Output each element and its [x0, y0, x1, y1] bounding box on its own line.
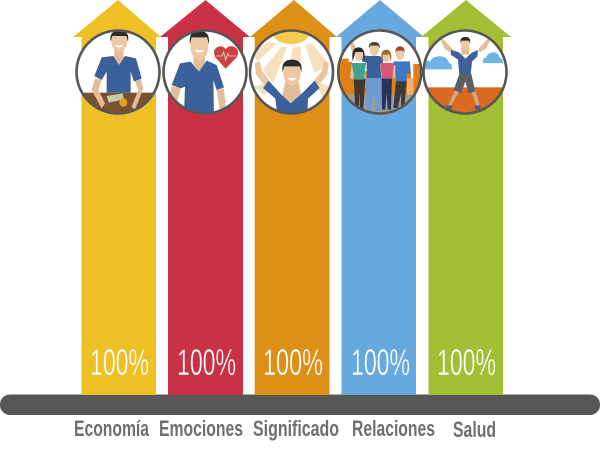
figure: woman in teal [350, 47, 366, 110]
icon: heart with pulse [214, 46, 238, 69]
percentage: Economía: 100% [90, 342, 149, 383]
icon: man holding up the sun [250, 30, 333, 115]
arrow: Significado [250, 0, 337, 395]
icon: man jumping outdoors [422, 30, 509, 117]
label: Economía: Economía [74, 416, 150, 441]
icon: group of friends [336, 30, 423, 118]
baseline bar [0, 394, 600, 415]
percentage: Relaciones: 100% [351, 342, 410, 383]
percentage: Significado: 100% [263, 342, 323, 383]
arrow: Emociones [160, 0, 250, 395]
label: Salud: Salud [453, 417, 496, 442]
icon: man with money at a table [73, 30, 163, 119]
figure: woman in pink [380, 50, 395, 110]
label: Relaciones: Relaciones [352, 416, 435, 441]
icon: man with heart [164, 30, 246, 115]
label: Significado: Significado [253, 416, 339, 441]
label: Emociones: Emociones [159, 416, 243, 441]
figure: man on the right [393, 46, 411, 108]
percentage: Emociones: 100% [177, 342, 236, 383]
arrow: Salud [421, 0, 511, 395]
arrow: Economía [73, 0, 161, 395]
arrow: Relaciones [336, 0, 424, 395]
figure: tall man [350, 42, 383, 111]
percentage: Salud: 100% [437, 342, 496, 383]
